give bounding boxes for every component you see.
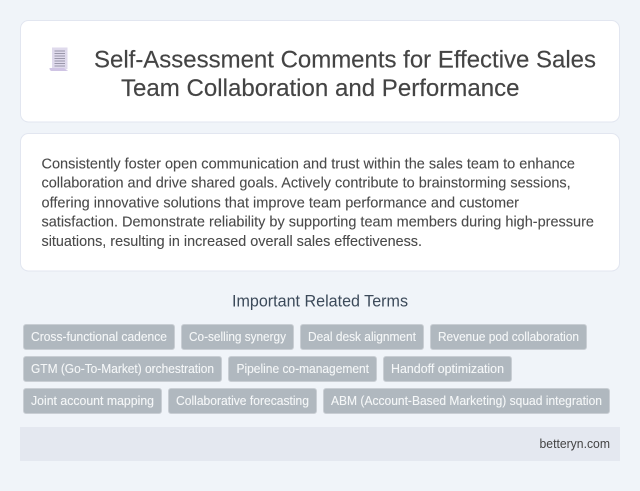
tag: deal desk alignment xyxy=(300,324,424,350)
tag: handoff optimization xyxy=(384,356,512,382)
text block: description: satisfaction. Demonstrate reliability by supporting team members during high-pressure xyxy=(42,214,594,231)
text block: description: situations, resulting in increased overall sales effectiveness. xyxy=(42,233,422,250)
panel: header card xyxy=(20,20,620,122)
text block: description: collaboration and drive shared goals. Actively contribute to brainstorming sessions, xyxy=(42,175,571,192)
tag: co-selling synergy xyxy=(182,324,294,350)
tag: abm squad integration xyxy=(324,388,610,414)
tag: gtm orchestration: GTM (Go-To-Market) orchestration xyxy=(31,361,214,376)
footer bar xyxy=(20,427,620,461)
text block: description: Consistently foster open communication and trust within the sales team to enhance xyxy=(42,155,575,172)
tag: collaborative forecasting xyxy=(168,388,316,414)
text block: description: offering innovative solutions that improve team performance and customer xyxy=(42,194,519,211)
tag: joint account mapping: Joint account mapping xyxy=(31,393,154,408)
tag: pipeline co-management: Pipeline co-management xyxy=(236,361,369,376)
tag: cross-functional cadence: Cross-functional cadence xyxy=(31,329,167,344)
title: Team Collaboration and Performance xyxy=(121,75,520,102)
tag: collaborative forecasting: Collaborative forecasting xyxy=(176,393,309,408)
title: Self-Assessment Comments for Effective Sales xyxy=(94,46,596,74)
tag: abm squad integration: ABM (Account-Based Marketing) squad integration xyxy=(331,393,602,408)
text block: description xyxy=(42,155,594,250)
icon: document scroll xyxy=(50,48,68,71)
tag: cross-functional cadence xyxy=(24,324,174,350)
tag: handoff optimization: Handoff optimization xyxy=(391,361,504,376)
tag: joint account mapping xyxy=(24,388,162,414)
tag: pipeline co-management xyxy=(228,356,376,382)
heading: important related terms: Important Related Terms xyxy=(232,293,408,311)
tag list xyxy=(24,324,610,414)
tag: co-selling synergy: Co-selling synergy xyxy=(189,329,286,344)
footer source text: betteryn.com xyxy=(540,437,610,451)
tag: revenue pod collaboration xyxy=(430,324,586,350)
tag: revenue pod collaboration: Revenue pod collaboration xyxy=(438,329,579,344)
tag: gtm orchestration xyxy=(24,356,222,382)
title xyxy=(94,46,596,102)
tag: deal desk alignment: Deal desk alignment xyxy=(308,329,416,344)
panel: description card xyxy=(20,134,620,271)
